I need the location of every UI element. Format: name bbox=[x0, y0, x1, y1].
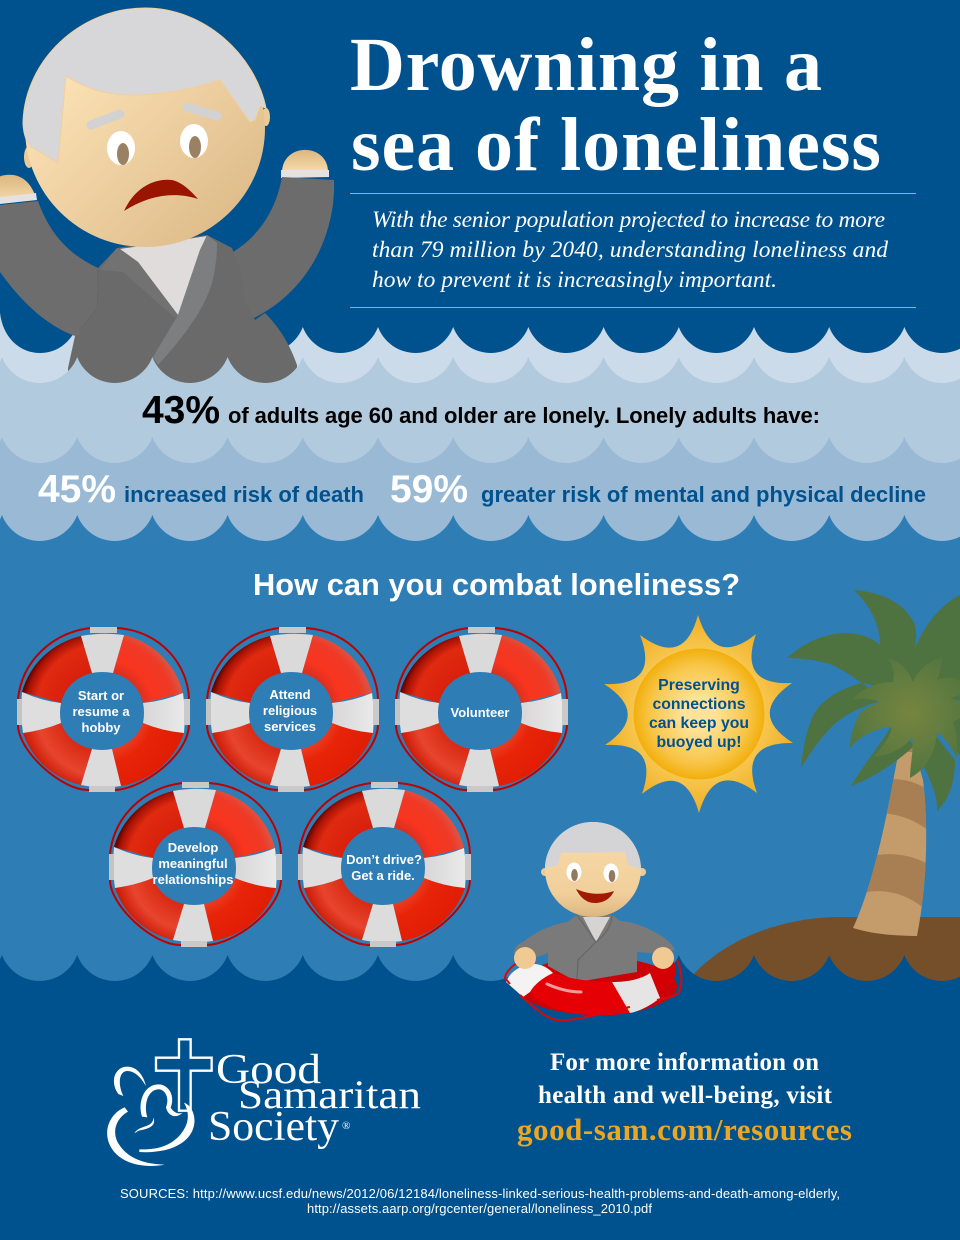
ring front: white bands bbox=[506, 964, 660, 1013]
fronds bbox=[787, 590, 960, 811]
left lapel bbox=[100, 248, 178, 318]
stat: 59 percent decline: greater risk of mental and physical decline bbox=[481, 482, 926, 507]
smile bbox=[576, 889, 614, 903]
intro text block: than 79 million by 2040, understanding loneliness and bbox=[372, 237, 888, 263]
palm tree bbox=[787, 590, 960, 936]
face bbox=[25, 9, 265, 247]
title: sea of loneliness bbox=[351, 103, 881, 187]
logo wordmark bbox=[208, 1047, 421, 1150]
eyebrows bbox=[91, 107, 217, 125]
illustration: distressed man in water bbox=[0, 8, 334, 390]
shirt bbox=[120, 236, 207, 315]
head bbox=[545, 822, 641, 917]
logo icon: cross and embracing figures bbox=[107, 1039, 212, 1166]
life ring: relationships: Develop bbox=[168, 840, 218, 855]
call to action text bbox=[517, 1049, 852, 1147]
logo wordmark: Society bbox=[208, 1104, 339, 1150]
right arm bbox=[228, 150, 334, 320]
heading: how can you combat loneliness: How can you combat loneliness? bbox=[253, 567, 740, 602]
right lapel bbox=[153, 235, 217, 365]
stat: 59 percent decline: 59% bbox=[390, 468, 468, 511]
logo: Good Samaritan Society bbox=[107, 1039, 421, 1166]
call to action text: For more information on bbox=[550, 1049, 819, 1076]
title bbox=[350, 23, 881, 187]
ring front: right red bbox=[650, 958, 676, 992]
frown bbox=[124, 180, 198, 211]
sun callout: connections bbox=[652, 696, 746, 713]
title: Drowning in a bbox=[350, 23, 822, 107]
life ring: religious services: services bbox=[264, 719, 316, 734]
logo wordmark: Good bbox=[216, 1047, 321, 1093]
left arm bbox=[0, 175, 98, 336]
wave band 5: deep water bbox=[0, 955, 960, 1240]
jacket bbox=[68, 235, 298, 390]
life ring: hobby: Start or bbox=[78, 688, 124, 703]
hair bbox=[23, 8, 266, 163]
wave band 1 bbox=[0, 313, 960, 600]
ring back bbox=[517, 957, 677, 1015]
sun callout: buoyed up! bbox=[656, 734, 742, 751]
life ring: religious services: Attend bbox=[269, 687, 311, 702]
lapel lines bbox=[577, 915, 612, 980]
wave band 2 bbox=[0, 357, 960, 600]
life ring: religious services bbox=[206, 627, 379, 792]
life ring: get a ride: Get a ride. bbox=[351, 868, 415, 883]
stat: 59 percent decline bbox=[390, 468, 926, 511]
wave band 4: mid blue sea bbox=[0, 515, 960, 1000]
ears bbox=[24, 108, 270, 168]
hands bbox=[514, 947, 674, 969]
life ring: hobby: resume a bbox=[72, 704, 130, 719]
eyes bbox=[566, 862, 618, 882]
life ring: religious services: religious bbox=[263, 703, 317, 718]
sun callout: Preserving bbox=[658, 677, 740, 694]
life ring: relationships: meaningful bbox=[158, 856, 228, 871]
island bbox=[692, 917, 960, 995]
life ring: hobby bbox=[17, 627, 190, 792]
sources bbox=[120, 1186, 840, 1216]
stat: 43 percent lonely: 43% bbox=[142, 389, 220, 432]
wave band 3 bbox=[0, 437, 960, 600]
stat: 43 percent lonely bbox=[142, 389, 820, 432]
stat: 45 percent risk of death: 45% bbox=[38, 468, 116, 511]
sun callout: can keep you bbox=[649, 715, 749, 732]
sun callout bbox=[604, 615, 793, 813]
life ring: relationships bbox=[109, 782, 282, 947]
call to action text: health and well-being, visit bbox=[538, 1082, 833, 1109]
life ring: volunteer bbox=[395, 627, 568, 792]
rope bbox=[505, 960, 681, 1020]
logo wordmark: ® bbox=[342, 1120, 350, 1132]
ears bbox=[541, 868, 646, 876]
frond centre bbox=[850, 657, 960, 778]
stat: 45 percent risk of death: increased risk of death bbox=[124, 482, 364, 507]
life ring: get a ride: Don’t drive? bbox=[346, 852, 422, 867]
life ring: hobby: hobby bbox=[82, 720, 121, 735]
sources: SOURCES: http://www.ucsf.edu/news/2012/06/12184/loneliness-linked-serious-health-problems-and-death-among-elderly, bbox=[120, 1186, 840, 1201]
ring front: red bbox=[530, 973, 630, 1015]
illustration: smiling man floating in ring bbox=[505, 822, 681, 1020]
shirt bbox=[583, 917, 610, 942]
logo wordmark: Samaritan bbox=[238, 1072, 421, 1117]
life ring: get a ride bbox=[298, 782, 471, 947]
sources: http://assets.aarp.org/rgcenter/general/loneliness_2010.pdf bbox=[307, 1201, 652, 1216]
call to action text: good-sam.com/resources bbox=[517, 1112, 852, 1147]
eyes bbox=[107, 124, 208, 165]
intro text block: With the senior population projected to increase to more bbox=[372, 207, 885, 233]
intro text block: how to prevent it is increasingly important. bbox=[372, 267, 777, 293]
ring highlight bbox=[547, 984, 581, 992]
trunk bbox=[853, 748, 926, 936]
life ring: relationships: relationships bbox=[153, 872, 233, 887]
hair bbox=[545, 822, 641, 869]
arms and jacket bbox=[513, 915, 675, 982]
stat: 43 percent lonely: of adults age 60 and older are lonely. Lonely adults have: bbox=[228, 403, 820, 428]
stat: 45 percent risk of death bbox=[38, 468, 364, 511]
intro text block bbox=[350, 193, 916, 308]
life ring: volunteer: Volunteer bbox=[450, 705, 510, 720]
